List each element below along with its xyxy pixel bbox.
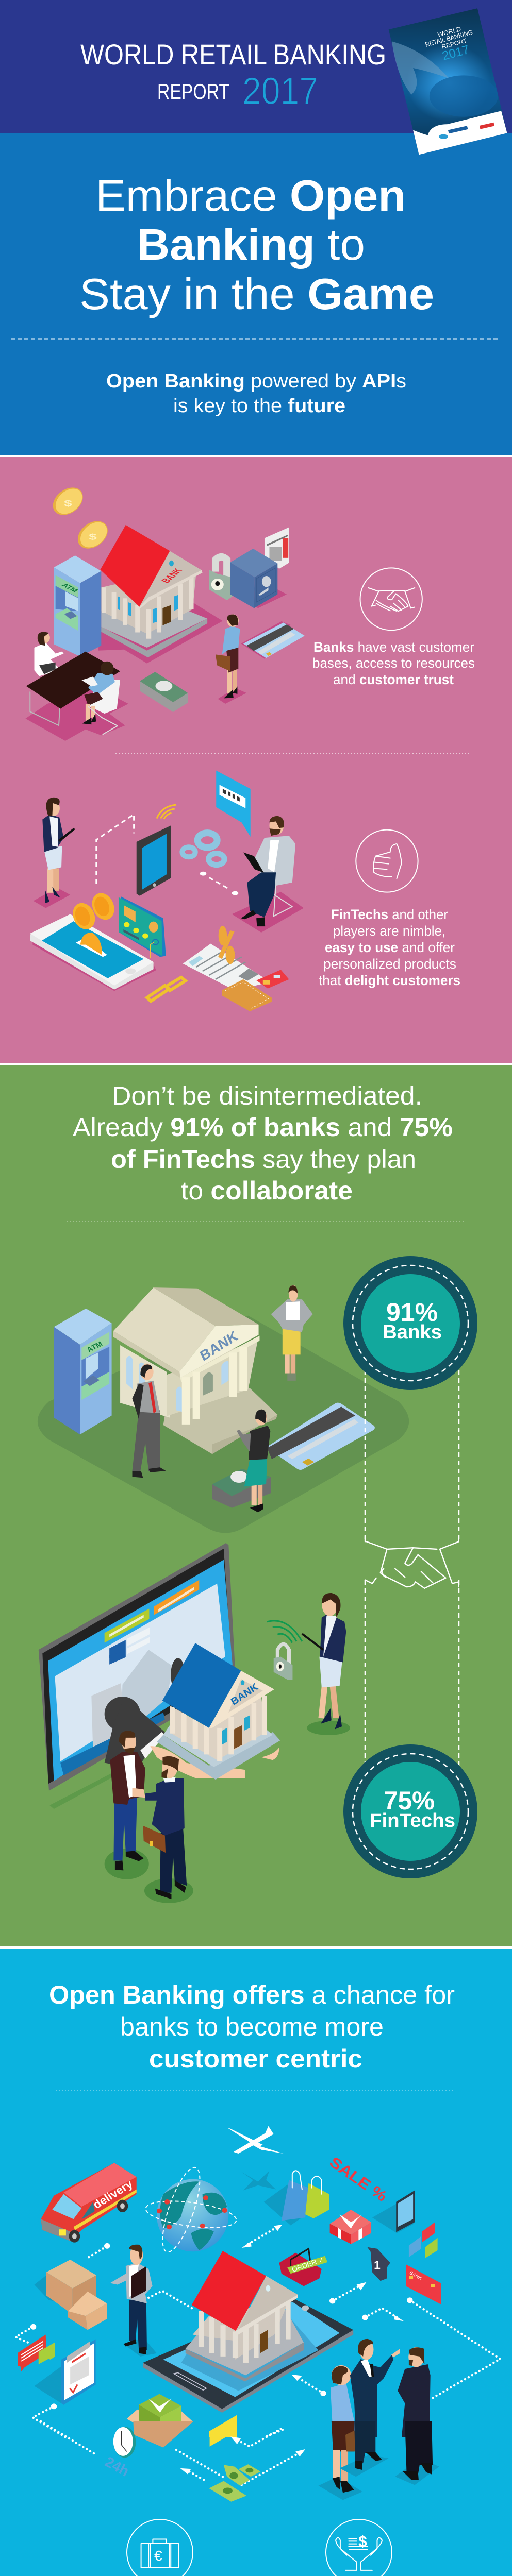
coin: $ [64,498,72,508]
dashed connector [96,815,134,884]
chain link [147,977,186,1001]
text: fintechs: players are nimble, [333,923,445,939]
bank building [100,525,207,657]
banknotes [209,2464,260,2502]
dashed link: banks to fintechs [365,1362,459,1775]
safe [230,549,287,608]
desk floor shadow [25,688,128,741]
seated man [232,816,304,933]
delivery van: delivery [91,2177,135,2211]
red bank card [406,2264,441,2304]
wifi and padlock [267,1621,302,1680]
green heading: Already 91% of banks and 75% [73,1113,453,1142]
cash stack [140,672,188,712]
woman with tablet [302,1593,350,1735]
woman with tablet [34,798,74,908]
text: fintechs: easy to use and offer [325,940,455,955]
ATM [54,1309,112,1434]
icon: hands with dollar [326,2519,392,2576]
icon: handshake link [365,1537,459,1588]
coin: $ [89,532,97,541]
businessman right [143,1756,193,1903]
gears [182,833,224,865]
wifi signal [157,805,176,819]
main title [79,172,434,319]
envelope [209,2415,237,2437]
text: fintechs: personalized products [323,956,456,972]
box bottom [133,2421,193,2448]
intro subtitle: Open Banking powered by APIs [106,370,406,392]
icon: briefcase with euro: € [154,2548,162,2564]
sale text: SALE % [326,2154,390,2205]
tablet [137,825,171,896]
section background: green [0,1065,512,1946]
blue heading: banks to become more [120,2012,384,2041]
man with folder [110,2245,157,2357]
illustration: bank, ATM and customers [25,485,305,741]
small bank on hand [157,1643,280,1780]
text: banks: bases, access to resources [312,655,475,671]
ATM: ATM [86,1340,104,1354]
stat badge: 75% fintechs [343,1744,477,1878]
icon: briefcase with euro [127,2519,193,2576]
header title [80,38,386,112]
gift in box [127,2394,193,2437]
main title: Banking to [137,221,365,269]
green payment card [119,896,166,958]
icon: handshake [360,568,422,630]
stat badge: 91% banks [343,1256,477,1390]
seated woman left [34,632,63,676]
report cover [389,8,507,155]
stat badge: 75% fintechs: FinTechs [370,1810,455,1832]
person: man in suit [350,2339,400,2437]
blue heading: Open Banking offers a chance for [49,1980,455,2009]
speech bubble [216,771,251,837]
stat badge: 91% banks: Banks [383,1321,442,1343]
phone with coins [30,892,156,991]
bank card [241,621,305,659]
gold percent sign [218,926,235,964]
illustration: ecosystem around the bank [15,2126,500,2437]
floor shadow [38,1316,409,1533]
delivery van [41,2163,137,2243]
bank building [113,1287,277,1454]
ATM: ATM [60,582,79,594]
main title: Embrace Open [95,172,406,221]
section background: blue speech bubble [0,1949,512,2576]
text: fintechs: that delight customers [319,973,460,988]
green heading: of FinTechs say they plan [111,1145,416,1174]
globe [144,2164,238,2256]
illustration: digital bank on green [39,1543,350,1903]
dotted flow lines [41,2421,305,2485]
shopping bags [264,2171,329,2225]
plane shadow [241,2171,276,2190]
standing woman in yellow skirt [271,1285,313,1381]
illustration: fintech players [30,771,304,1011]
man with red tie [132,1364,166,1478]
calendar [265,528,289,569]
invoice document [183,944,270,991]
section background: header band [0,0,512,133]
padlock [209,557,234,600]
coin [72,519,113,551]
section background: intro [0,133,512,455]
legs: woman [318,2421,362,2500]
woman in teal skirt [237,1410,270,1512]
seated woman right [81,662,120,734]
coin [47,485,88,517]
wallet [222,979,272,1011]
intro subtitle [106,370,406,417]
ATM [54,555,101,656]
basket [279,2249,327,2286]
bank building: BANK [159,567,185,584]
icon: hands with dollar: $ [358,2533,367,2550]
section background: pink [0,457,512,1063]
clock [113,2427,136,2458]
report cover: 2017 [441,43,471,63]
central bank on tablet [143,2251,353,2413]
stat badge: 91% banks: 91% [386,1298,438,1327]
monitor [39,1543,236,1809]
desk [26,652,120,725]
chat bubbles [18,2334,55,2371]
sleeve and hand from screen [105,1658,279,1778]
standing woman with briefcase [216,614,246,704]
small bank on hand: BANK [229,1681,260,1708]
text: banks: and customer trust [333,672,454,687]
blue heading: customer centric [149,2044,362,2073]
businessman left [105,1731,149,1879]
cash stack [212,1469,271,1508]
cardboard boxes [34,2260,107,2330]
person: man from behind [398,2347,431,2437]
basket: ORDER ✓ [291,2256,325,2274]
dotted connector [200,872,238,895]
blue heading [49,1980,455,2073]
stat badge: 75% fintechs: 75% [384,1786,435,1815]
bank building: BANK [197,1328,240,1364]
shirt [367,2247,390,2281]
text: banks: Banks have vast customer [313,639,474,655]
header title: WORLD RETAIL BANKING [80,38,386,71]
red card [256,970,289,989]
illustration: bank scene on green [38,1285,409,1533]
legs: man [340,2421,389,2477]
24h text: 24h [103,2453,132,2480]
text: banks [312,639,475,687]
icon: thumbs up [356,830,418,892]
report cover: REPORT [441,37,468,50]
text: fintechs [319,907,460,988]
red bank card: BANK [409,2270,423,2281]
bank floor shadow [98,598,223,664]
gift box [330,2210,371,2244]
green heading [73,1081,453,1205]
green heading: Don’t be disintermediated. [112,1081,422,1110]
main title: Stay in the Game [79,270,434,319]
header title: REPORT [157,79,229,104]
app tiles [409,2222,438,2258]
person: woman [331,2365,356,2437]
report cover: RETAIL BANKING [424,28,474,48]
plane [227,2126,284,2154]
dotted flow lines [15,2225,500,2437]
text: fintechs: FinTechs and other [331,907,448,922]
shirt: 1 [374,2259,381,2272]
green heading: to collaborate [181,1176,353,1205]
intro subtitle: is key to the future [173,395,345,417]
envelope bottom [210,2421,237,2447]
illustration: lower part of ecosystem [41,2421,439,2502]
header title: 2017 [242,70,318,112]
legs: man behind [395,2421,439,2485]
report cover: WORLD [437,25,462,39]
bank card [266,1403,375,1470]
tablet [372,2190,415,2233]
clipboard [34,2340,96,2405]
